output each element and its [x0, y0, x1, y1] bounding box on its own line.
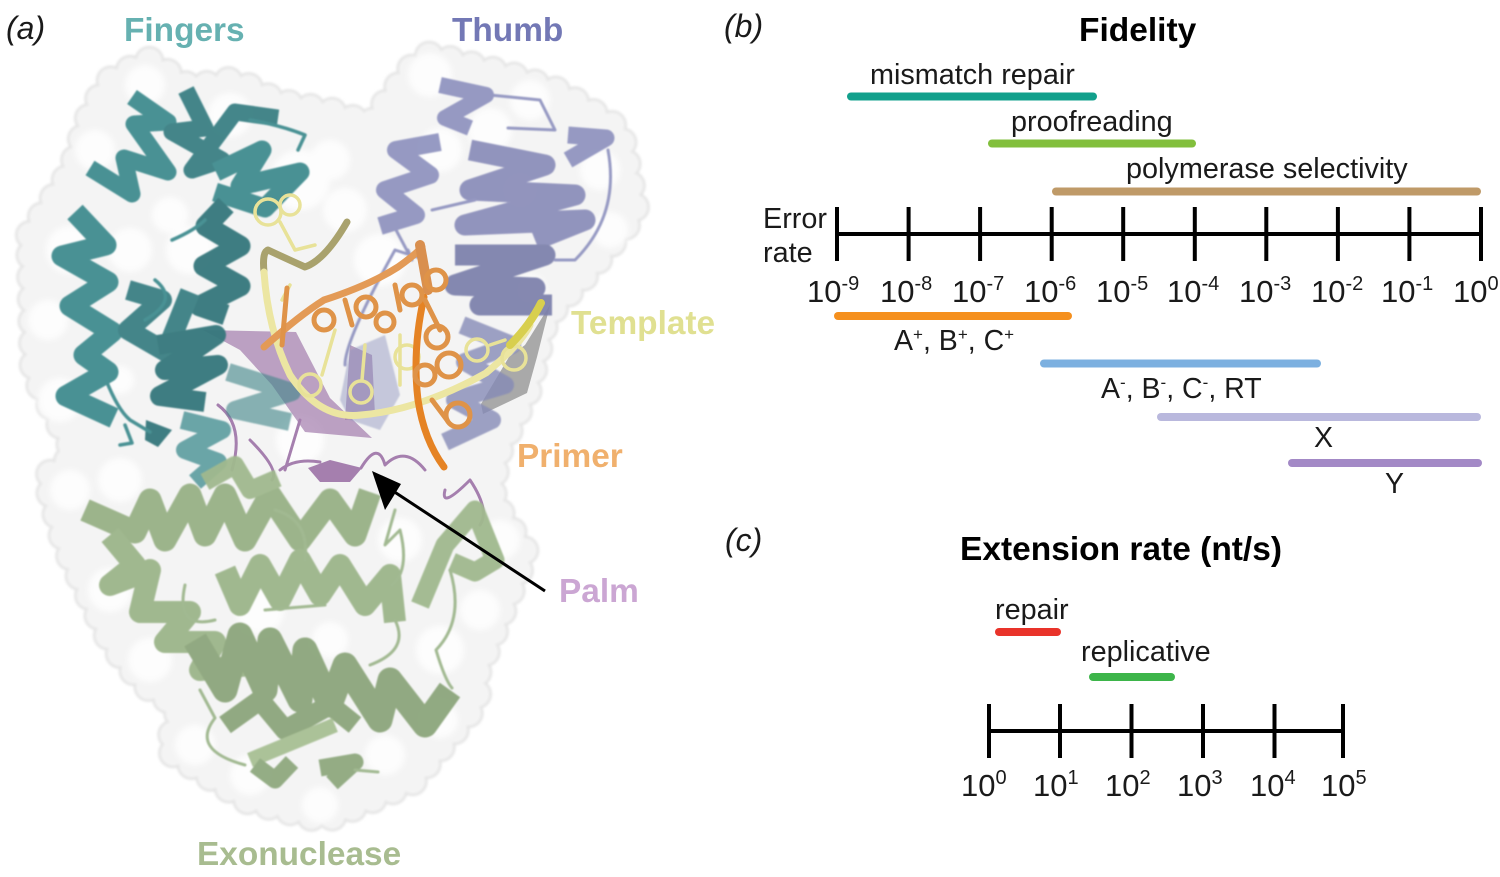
- axis tick labels: extension rate: 4: [1284, 767, 1296, 789]
- domain: palm (purple): [203, 330, 483, 525]
- label: Thumb: Thumb: [452, 12, 563, 49]
- axis tick labels: error rate: -8: [914, 273, 932, 295]
- bar: A- B- C- RT: , B: [1126, 373, 1161, 405]
- axis tick labels: error rate: -2: [1345, 273, 1363, 295]
- bar: X: X: [1314, 422, 1333, 454]
- domain: fingers (teal): [62, 90, 305, 482]
- axis tick labels: error rate: 0: [1487, 273, 1499, 295]
- panel b: fidelity: [763, 12, 1499, 500]
- axis tick labels: extension rate: 10: [1105, 768, 1139, 803]
- domain: exonuclease (sage green): [85, 465, 495, 783]
- bar: mismatch repair: mismatch repair: [870, 59, 1075, 91]
- axis tick labels: extension rate: 10: [1321, 768, 1355, 803]
- label: Palm: Palm: [559, 573, 639, 610]
- arrow: palm pointer: [372, 471, 545, 591]
- label: Exonuclease: Exonuclease: [197, 836, 401, 873]
- DNA: primer strand and bases: [264, 245, 470, 467]
- axis tick labels: error rate: 10: [1381, 274, 1415, 309]
- axis tick labels: extension rate: 10: [1177, 768, 1211, 803]
- axis tick labels: error rate: -6: [1058, 273, 1076, 295]
- bar: A- B- C- RT: -: [1120, 373, 1126, 392]
- axis tick labels: error rate: 10: [1024, 274, 1058, 309]
- axis tick labels: error rate: 10: [1239, 274, 1273, 309]
- label: Fingers: Fingers: [124, 12, 245, 49]
- axis tick labels: error rate: 10: [880, 274, 914, 309]
- shadow near template end: [481, 305, 550, 414]
- bar: A+ B+ C+: +: [913, 325, 923, 344]
- bar: A+ B+ C+: [838, 316, 1068, 357]
- bar: replicative: replicative: [1081, 636, 1211, 668]
- axis tick labels: extension rate: 10: [961, 768, 995, 803]
- axis tick labels: error rate: 10: [1096, 274, 1130, 309]
- axis tick labels: extension rate: 10: [1250, 768, 1284, 803]
- bar: polymerase selectivity: polymerase selectivity: [1126, 153, 1408, 185]
- bar: A- B- C- RT: A: [1101, 373, 1120, 405]
- axis tick labels: extension rate: 2: [1139, 767, 1151, 789]
- bar: A- B- C- RT: -: [1161, 373, 1166, 392]
- DNA: template strand and bases: [255, 195, 541, 416]
- axis tick labels: error rate: [807, 273, 1499, 309]
- error rate axis: [837, 207, 1481, 261]
- extension rate axis: [989, 704, 1343, 758]
- heading: Extension rate: Extension rate (nt/s): [960, 531, 1282, 568]
- label: Template: Template: [571, 305, 715, 342]
- bar: A+ B+ C+: A: [894, 325, 913, 357]
- axis tick labels: error rate: -1: [1415, 273, 1433, 295]
- bar: A+ B+ C+: +: [1004, 325, 1014, 344]
- axis labels: domains: [124, 12, 715, 873]
- axis tick labels: error rate: 10: [1167, 274, 1201, 309]
- panel c: extension rate: [960, 531, 1367, 803]
- panel letter a: (a): [6, 10, 45, 46]
- axis tick labels: extension rate: 5: [1355, 767, 1367, 789]
- bar: A- B- C- RT: [1044, 364, 1317, 405]
- axis tick labels: error rate: 10: [952, 274, 986, 309]
- bar: A+ B+ C+: , B: [923, 325, 958, 357]
- panel a: protein structure: [28, 12, 715, 873]
- bar: A+ B+ C+: +: [958, 325, 968, 344]
- axis tick labels: error rate: -5: [1130, 273, 1148, 295]
- axis tick labels: extension rate: 1: [1067, 767, 1079, 789]
- axis tick labels: extension rate: 0: [995, 767, 1007, 789]
- axis tick labels: extension rate: [961, 767, 1367, 803]
- axis tick labels: error rate: 10: [807, 274, 841, 309]
- domain: thumb (slate blue): [340, 85, 611, 442]
- bar: Y: Y: [1385, 468, 1404, 500]
- bar: A+ B+ C+: , C: [968, 325, 1004, 357]
- axis tick labels: error rate: -7: [986, 273, 1004, 295]
- axis tick labels: error rate: -9: [841, 273, 859, 295]
- label: error rate: rate: [763, 237, 813, 269]
- label: Primer: Primer: [517, 438, 623, 475]
- bar: A- B- C- RT: , C: [1166, 373, 1203, 405]
- bar: repair: repair: [995, 594, 1069, 626]
- axis tick labels: extension rate: 10: [1033, 768, 1067, 803]
- bar: proofreading: proofreading: [1011, 106, 1173, 138]
- label: error rate: Error: [763, 203, 827, 235]
- bar: A- B- C- RT: -: [1203, 373, 1208, 392]
- bar: A- B- C- RT: , RT: [1208, 373, 1262, 405]
- molecular surface: [28, 53, 636, 823]
- axis tick labels: extension rate: 3: [1211, 767, 1223, 789]
- heading: Fidelity: Fidelity: [1079, 12, 1197, 49]
- axis tick labels: error rate: -3: [1273, 273, 1291, 295]
- axis tick labels: error rate: -4: [1201, 273, 1219, 295]
- panel letter c: (c): [725, 522, 762, 558]
- axis tick labels: error rate: 10: [1453, 274, 1487, 309]
- axis tick labels: error rate: 10: [1311, 274, 1345, 309]
- panel letter b: (b): [724, 8, 763, 44]
